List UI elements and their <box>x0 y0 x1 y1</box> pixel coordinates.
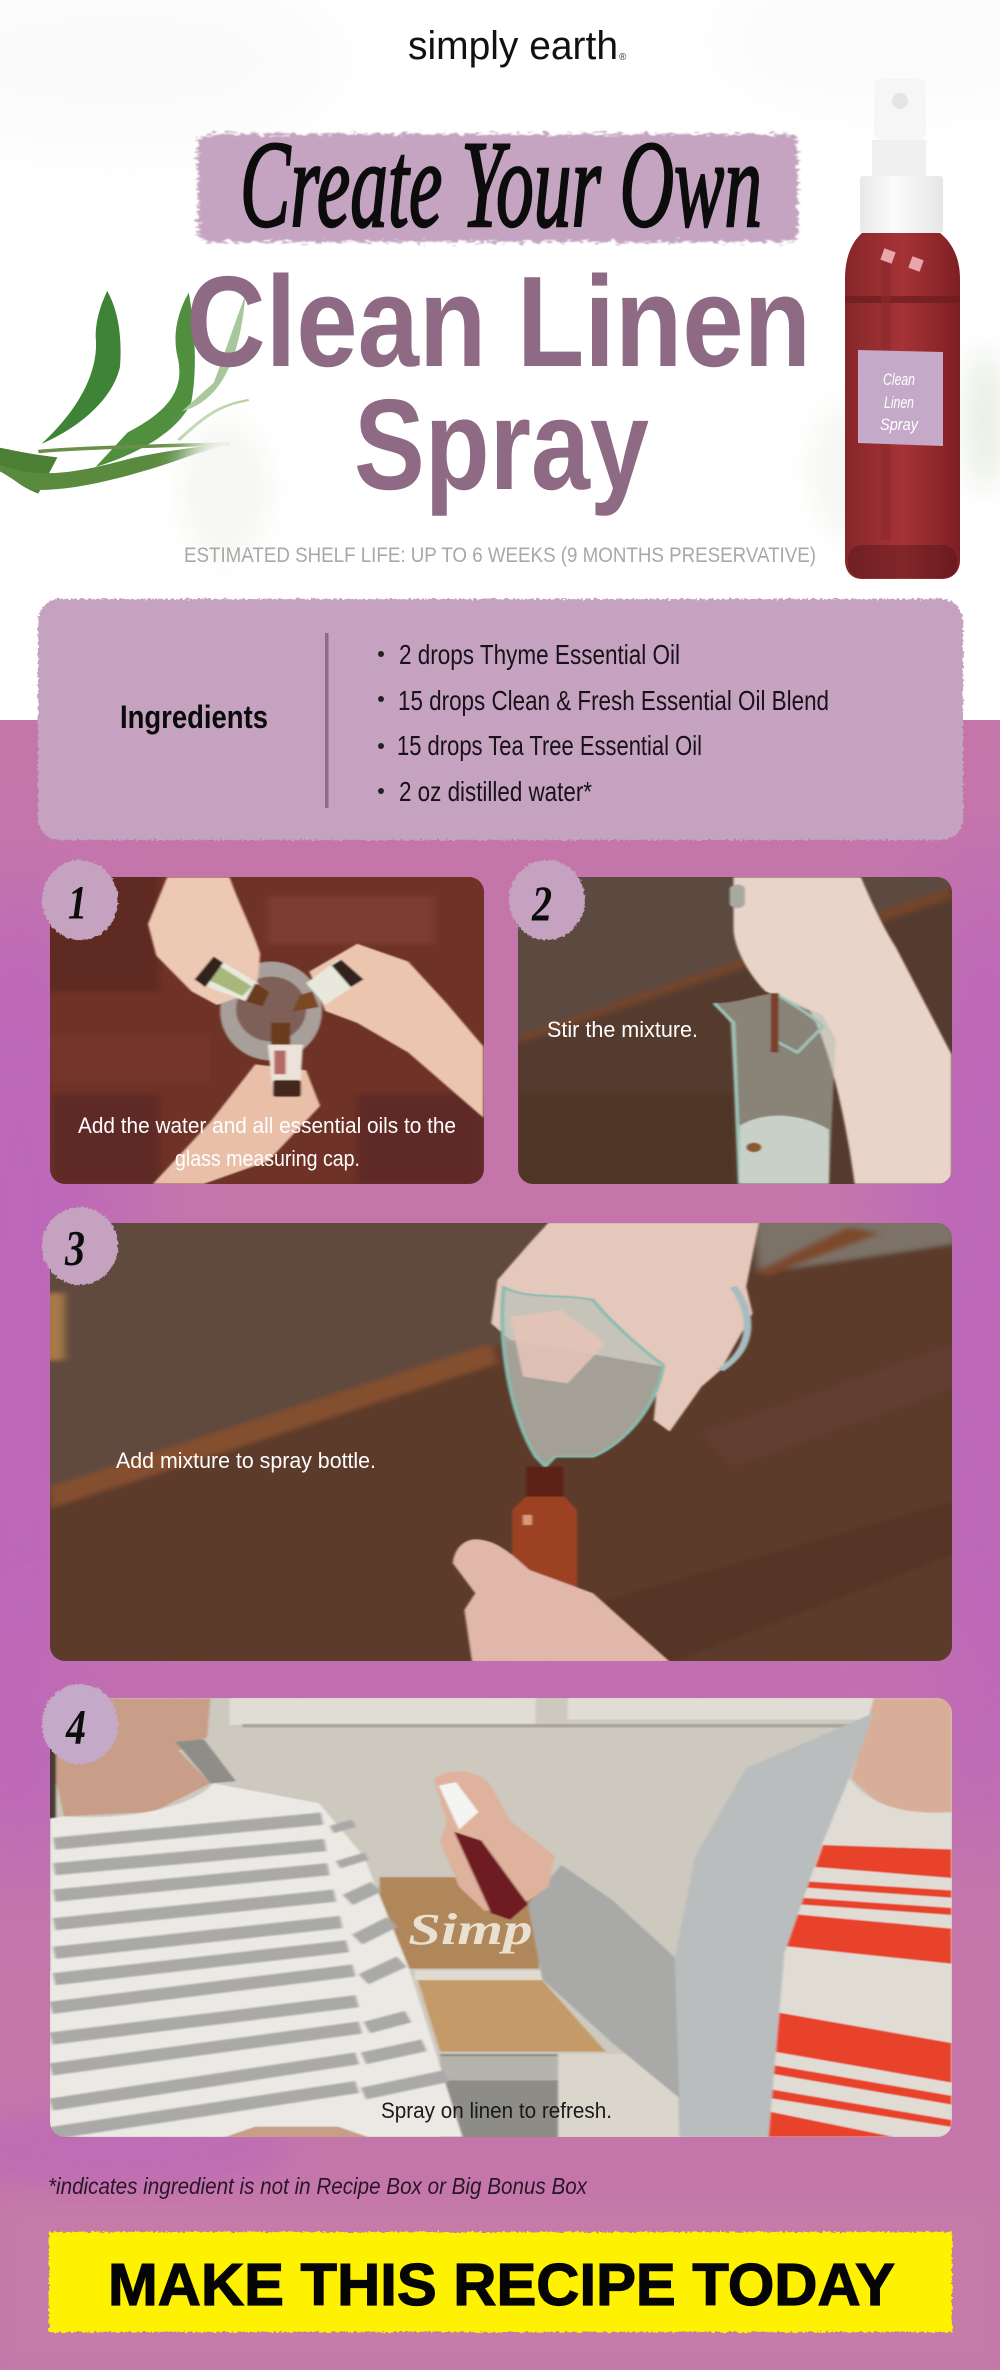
step 1 caption <box>78 1113 456 1171</box>
ingredients list: 15 drops Tea Tree Essential Oil <box>397 730 702 761</box>
ingredients list: 2 drops Thyme Essential Oil <box>399 639 680 670</box>
bottle label: Clean <box>883 370 915 389</box>
step 1 caption: glass measuring cap. <box>175 1146 360 1171</box>
ingredients heading: Ingredients <box>120 699 268 735</box>
header photo: green sprig at left <box>0 291 249 494</box>
step 1 panel <box>41 859 484 1184</box>
step 3 panel <box>19 1207 982 1677</box>
ingredients list: 2 oz distilled water* <box>399 776 592 807</box>
product: red spray bottle with label <box>845 78 960 579</box>
step 2 badge: 2 <box>531 876 552 931</box>
step 4 badge: 4 <box>65 1700 86 1755</box>
brush stroke behind script heading <box>198 134 798 242</box>
step 4 badge <box>42 1684 118 1764</box>
ingredients list: 15 drops Clean & Fresh Essential Oil Blend <box>398 685 829 716</box>
call to action banner <box>49 2232 952 2332</box>
logo: Simply Earth: simply earth <box>408 24 618 68</box>
bottle label <box>858 350 943 446</box>
step 2 badge <box>509 860 585 940</box>
step 1 badge: 1 <box>68 878 87 930</box>
bottle B <box>305 960 356 1005</box>
step 3 caption: Add mixture to spray bottle. <box>116 1448 376 1473</box>
bottle A <box>198 956 258 1001</box>
call to action banner: MAKE THIS RECIPE TODAY <box>108 2252 895 2318</box>
panel: ingredients <box>38 599 963 840</box>
step 4 caption: Spray on linen to refresh. <box>381 2098 612 2123</box>
ingredients list <box>378 639 829 807</box>
background: white header and pink body <box>0 720 1000 2370</box>
heading: Create Your Own: Create Your Own <box>240 116 762 253</box>
step 3 badge: 3 <box>64 1221 85 1276</box>
step 1 badge <box>42 860 118 940</box>
bottle label: Linen <box>884 393 914 412</box>
heading: Spray: Spray <box>354 373 649 517</box>
step 2 panel <box>508 860 952 1184</box>
header photo: white flowers <box>180 350 1000 560</box>
step 2 caption: Stir the mixture. <box>547 1017 698 1042</box>
logo: Simply Earth: ® <box>619 52 627 63</box>
shelf life note: ESTIMATED SHELF LIFE: UP TO 6 WEEKS (9 MONTHS PRESERVATIVE) <box>184 544 816 567</box>
footnote: *indicates ingredient is not in Recipe Box or Big Bonus Box <box>48 2173 588 2199</box>
step 3 photo: pouring mixture into bottle <box>50 1223 952 1661</box>
step 1 caption: Add the water and all essential oils to the <box>78 1113 456 1138</box>
heading: Clean Linen: Clean Linen <box>186 250 811 394</box>
step 4 photo: spraying the linen: Simp <box>408 1905 533 1954</box>
step 4 panel <box>42 1684 957 2138</box>
bottle C <box>268 1045 303 1094</box>
step 1 photo: hands adding oils over wood <box>50 877 484 1184</box>
step 3 badge <box>42 1207 118 1285</box>
step 2 photo: stirring in measuring glass <box>518 877 952 1184</box>
step 4 photo: spraying the linen <box>45 1698 957 2138</box>
bottle label: Spray <box>880 415 919 434</box>
